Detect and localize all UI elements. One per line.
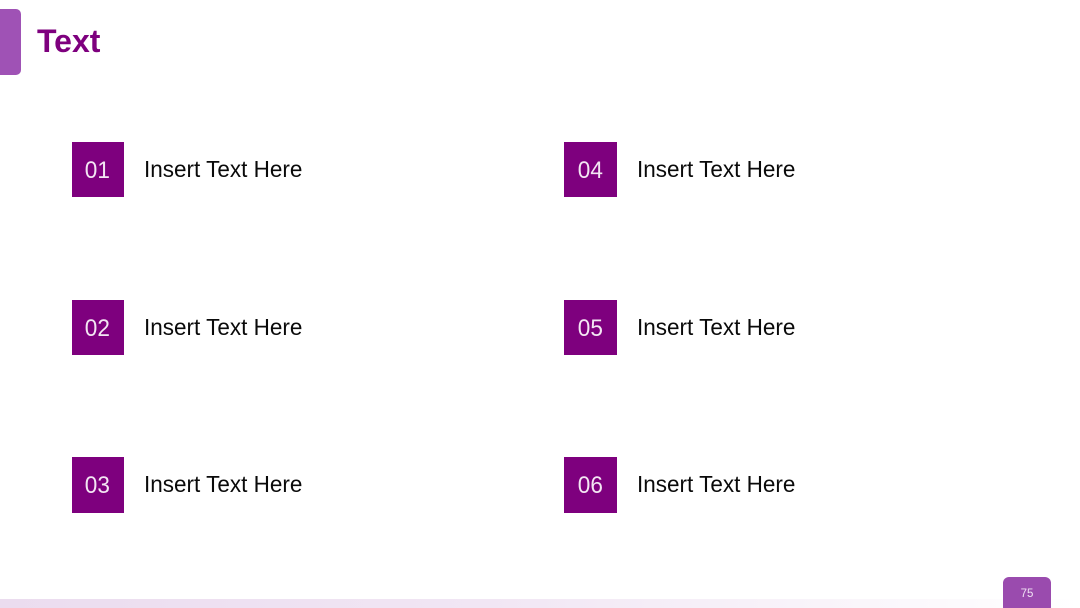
page number tab [1003,577,1051,608]
number badge 05: 05 [578,315,603,342]
item 01 [72,142,302,197]
item text 02: Insert Text Here [144,314,302,340]
item 04 [564,142,795,197]
item 02 [72,300,302,355]
number badge 01: 01 [85,157,110,184]
item 05 [564,300,795,355]
number badge 02: 02 [85,315,110,342]
number badge 05 [564,300,616,355]
footer gradient bar [0,599,1080,608]
number badge 03 [72,457,124,513]
item text 03: Insert Text Here [144,471,302,497]
item text 01: Insert Text Here [144,156,302,182]
number badge 06 [564,457,616,513]
item 06 [564,457,795,513]
number badge 04 [564,142,616,197]
number badge 04: 04 [578,157,603,184]
item 03 [72,457,302,513]
header accent tab [0,9,21,75]
number badge 06: 06 [578,472,603,499]
number badge 01 [72,142,124,197]
number badge 03: 03 [85,472,110,499]
title: Text [37,23,100,59]
item text 04: Insert Text Here [637,156,795,182]
item text 06: Insert Text Here [637,471,795,497]
item text 05: Insert Text Here [637,314,795,340]
number badge 02 [72,300,124,355]
page number tab: 75 [1021,588,1033,600]
